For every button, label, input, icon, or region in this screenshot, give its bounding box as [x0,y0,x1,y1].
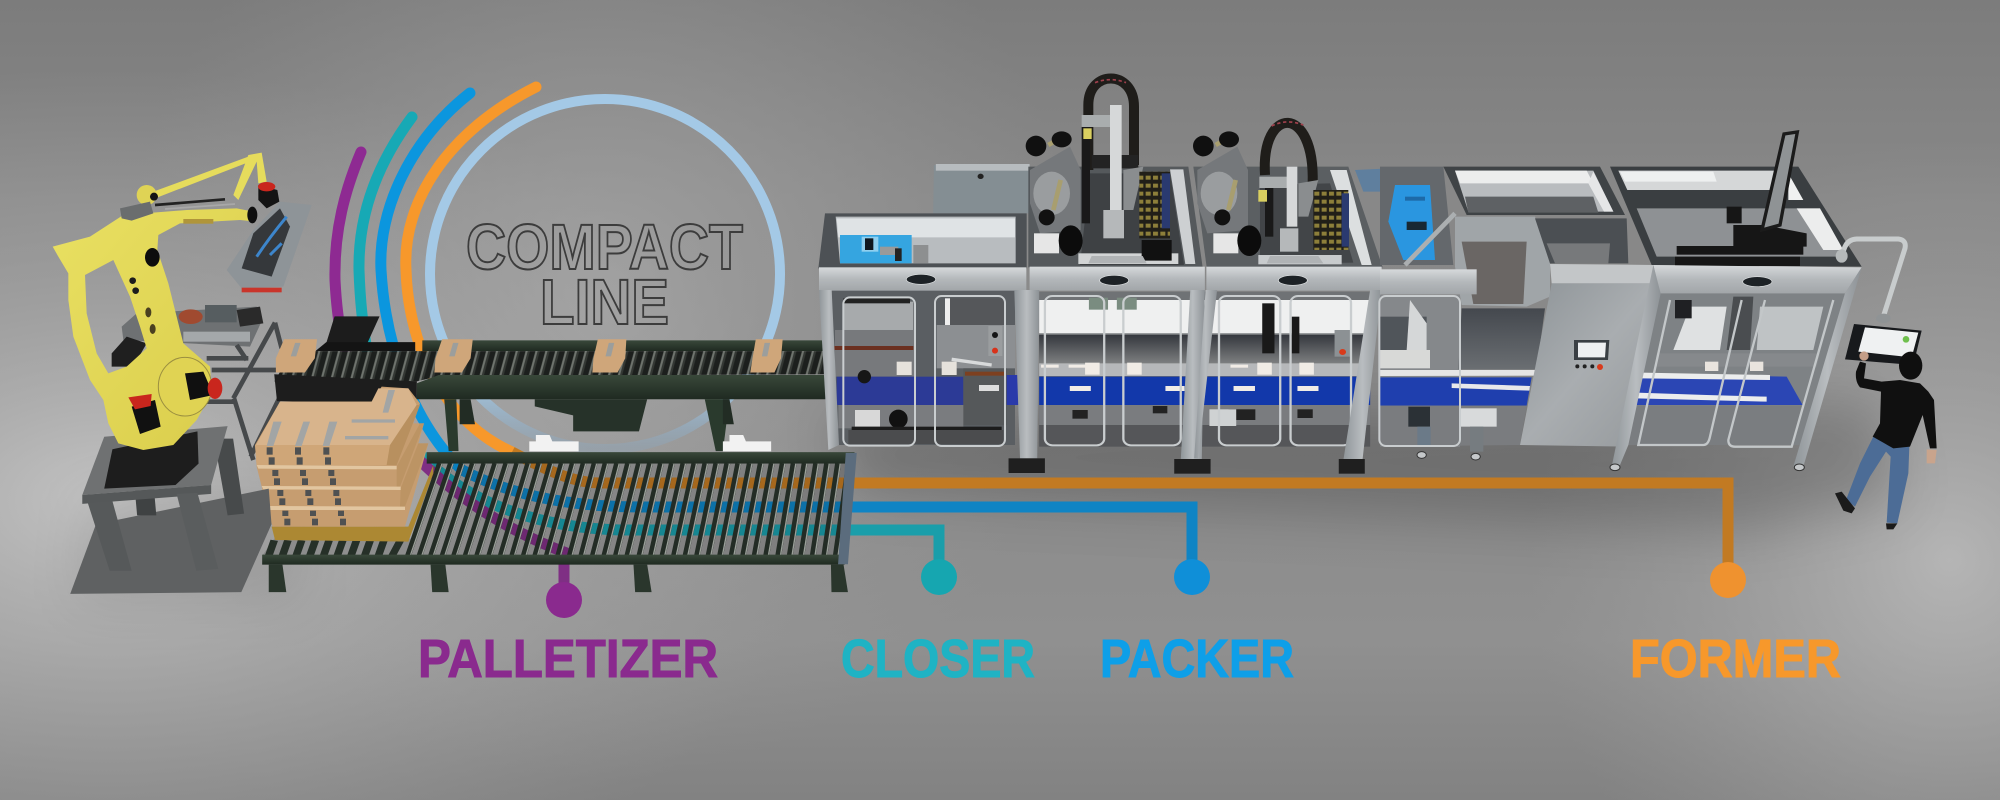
title outline: compact line [466,211,743,338]
electrical cabinet [1520,264,1655,447]
robot pedestal table [82,426,244,571]
former header with logo [1653,265,1862,293]
white packages [529,435,771,451]
module 1 interior [832,290,1025,445]
tall actuator column [1082,105,1147,263]
adjustable feet [1417,452,1804,471]
servo unit right [1193,131,1261,256]
module 4 hood [1379,217,1628,446]
former legs [1612,265,1862,467]
module 1 top enclosure [818,213,1027,268]
back electrical cabinet [933,164,1030,213]
label: closer: CLOSER [841,629,1035,689]
label: palletizer: PALLETIZER [418,629,718,689]
module 4 top enclosure [1380,167,1625,265]
safety doors [1045,296,1351,445]
former top enclosure [1610,167,1862,267]
title outline: compact line: COMPACT [466,211,743,283]
module headers with logos [1030,267,1382,291]
label: packer: PACKER [1100,629,1294,689]
lower pallet roller conveyor [262,452,857,592]
cable chain, tall [1088,78,1134,170]
robot arm [53,153,279,450]
robot gripper [227,202,312,292]
short actuator column [1258,167,1323,263]
former vertical arm [1762,132,1797,230]
former interior and belt [1628,293,1845,447]
packing machine modules 2 and 3 [1009,267,1382,474]
flow line: packer (blue) [381,93,1210,595]
robot mounting plate [70,489,271,594]
cartons on infeed conveyor [276,339,783,372]
flow line: closer (teal) [359,117,957,595]
energy chain stack right [1313,190,1349,250]
former section and electrical cabinet [1379,132,1905,471]
title outline: compact line: LINE [540,266,669,338]
module 2 tray [1028,167,1203,267]
packer modules top section [1026,78,1390,267]
module 1 header with logo [819,267,1026,291]
leg feet [1009,458,1365,474]
module interior, modules 2 and 3 [1039,292,1370,447]
cable chain, short [1265,122,1313,183]
flow line: former (orange) [406,87,1746,598]
robot frame and equipment rack [112,305,282,460]
module 1 safety doors [843,296,1005,446]
module 1 [818,213,1027,450]
module 1 left leg [819,290,839,450]
flow line: palletizer (purple) [335,152,582,618]
floor shadow under machines [80,400,1900,600]
control arm pipe [1836,239,1905,317]
frame legs [1014,290,1382,460]
former black assembly [1675,207,1807,266]
operator [1835,351,1937,529]
energy chain stack left [1139,172,1170,238]
servo unit left [1026,131,1083,256]
light blue compact line circle [430,99,780,449]
label: former: FORMER [1630,629,1841,689]
chute flap and upper infeed conveyor [274,316,825,451]
module 3 tray [1193,167,1390,267]
carton stack on pallet [255,387,433,542]
module 4 interior and belt [1380,295,1537,452]
operator touchscreen [1845,314,1922,365]
